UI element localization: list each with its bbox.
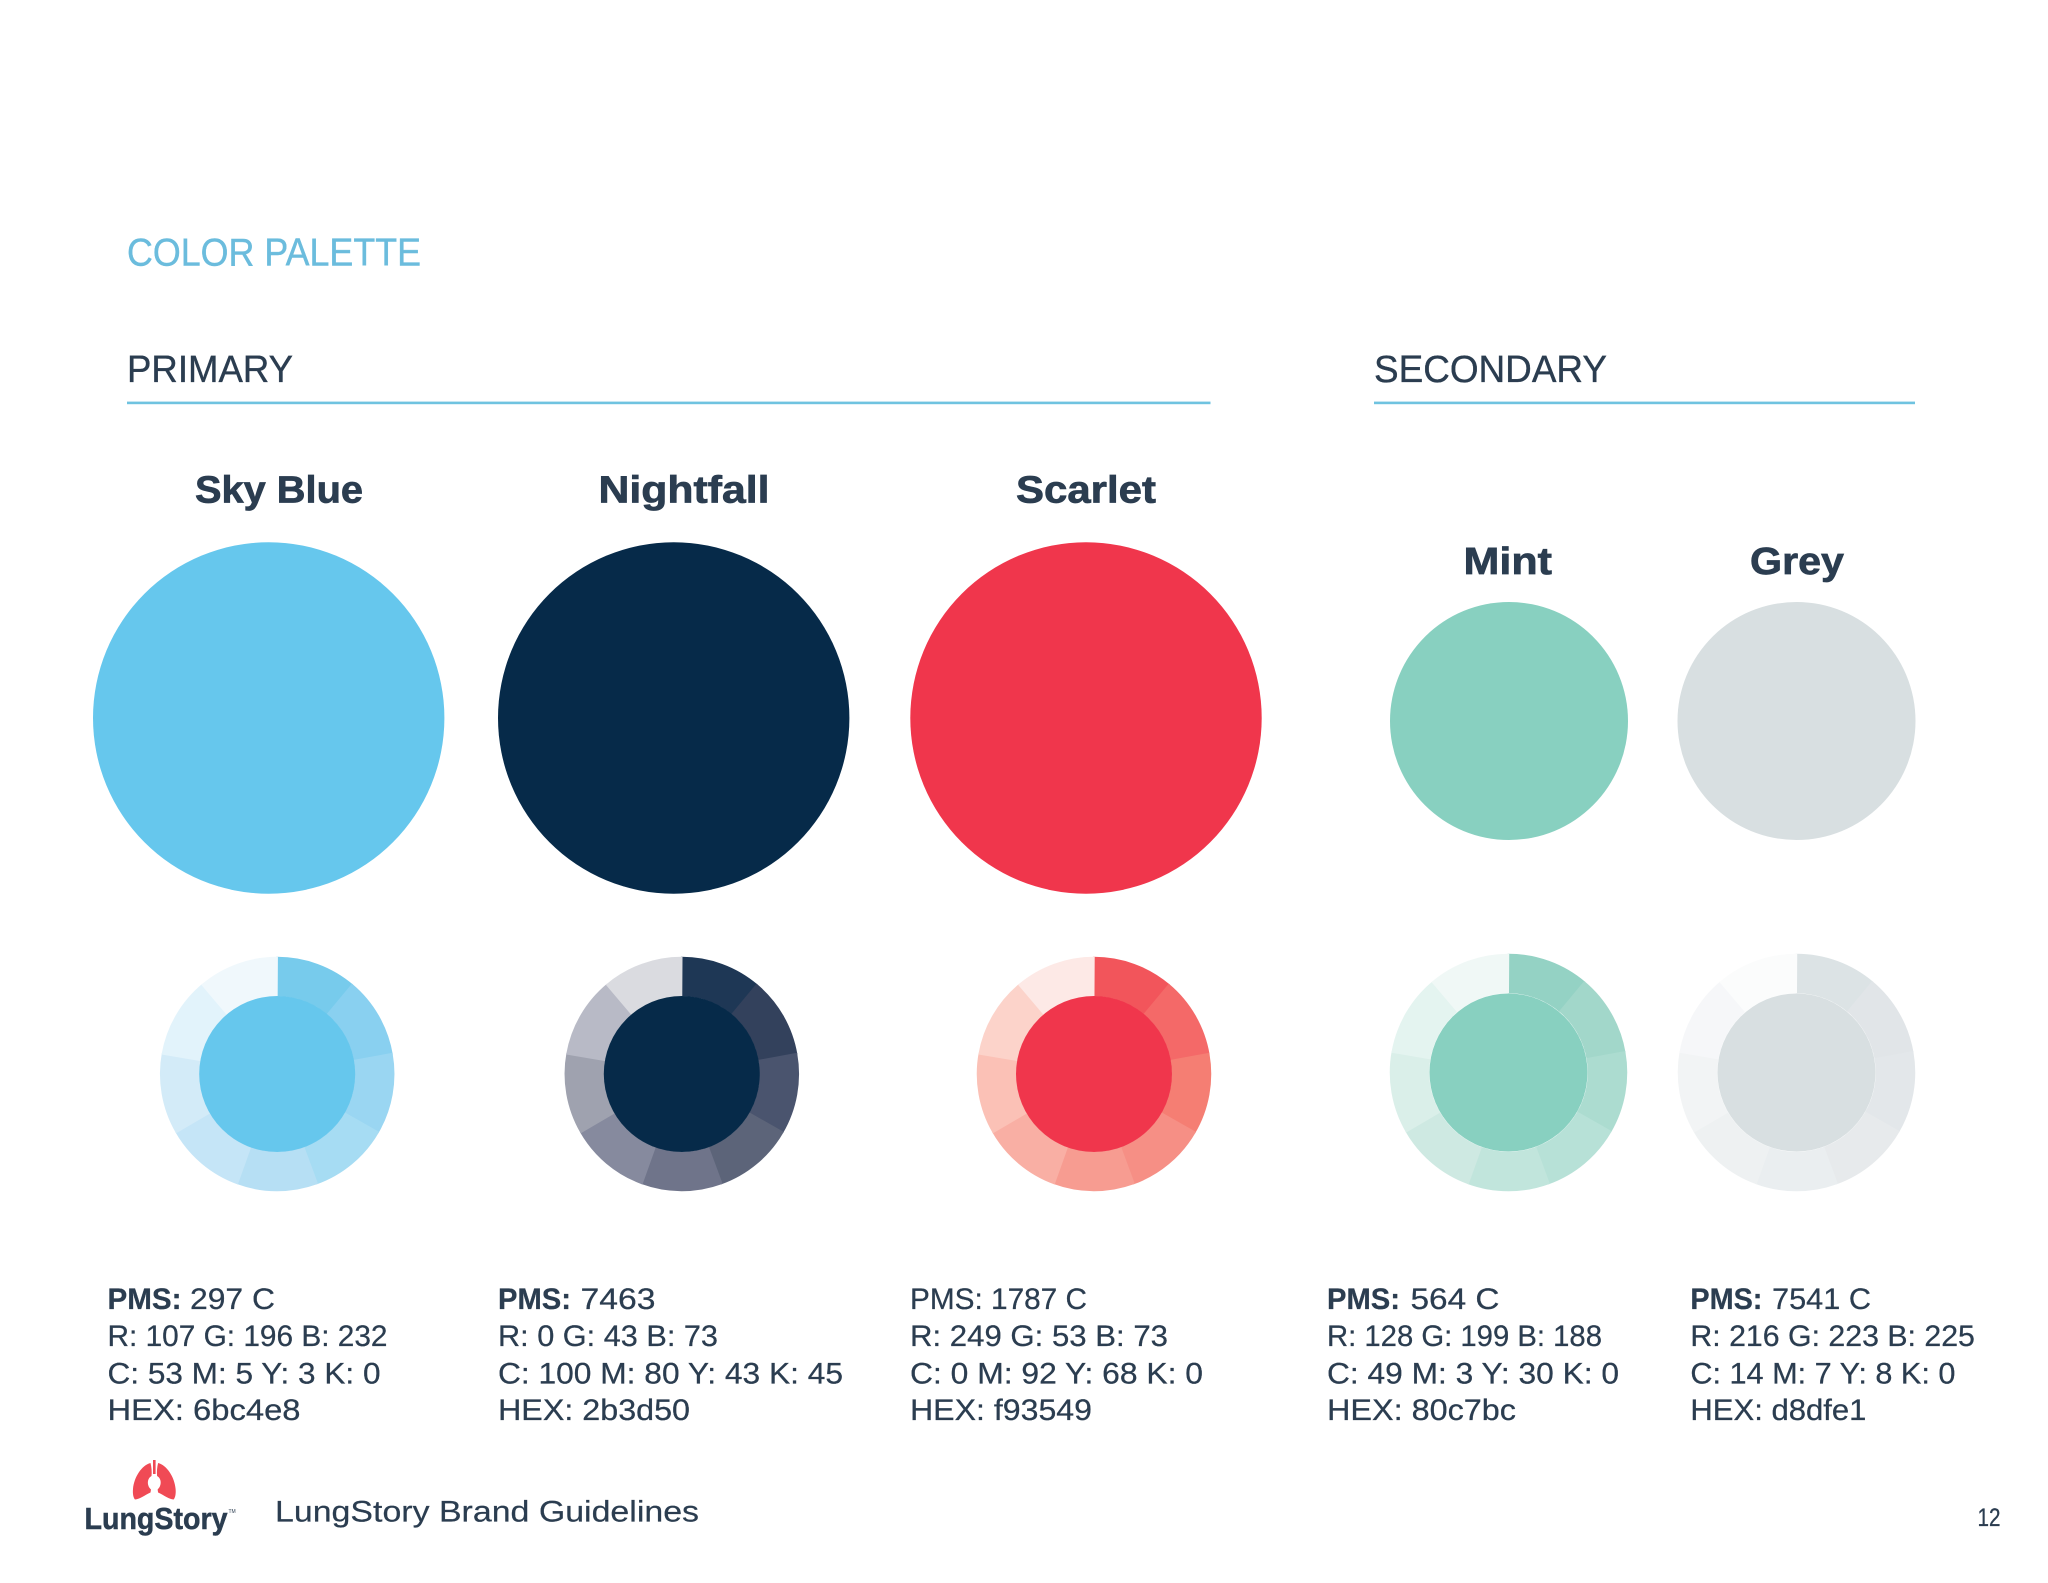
color values: scarlet: PMS: 1787 C xyxy=(910,1283,1087,1316)
logo: LungStory xyxy=(84,1460,236,1536)
color values: grey: HEX: d8dfe1 xyxy=(1690,1394,1866,1427)
color values: mint: C: 49 M: 3 Y: 30 K: 0 xyxy=(1327,1358,1619,1390)
color values: sky blue: PMS: xyxy=(108,1283,182,1316)
color values: sky blue: HEX: 6bc4e8 xyxy=(108,1394,300,1427)
swatch: nightfall xyxy=(498,542,849,894)
color values: mint: 564 C xyxy=(1410,1283,1500,1316)
swatch: grey xyxy=(1678,602,1916,840)
panel: mint xyxy=(1327,541,1648,1427)
tint wheel: grey xyxy=(1657,933,1936,1212)
name: mint: Mint xyxy=(1464,541,1552,583)
color values: nightfall: PMS: xyxy=(498,1283,571,1316)
color values: mint: R: 128 G: 199 B: 188 xyxy=(1327,1320,1602,1353)
color values: nightfall xyxy=(498,1283,843,1427)
panel: grey xyxy=(1657,541,1975,1427)
color values: scarlet: R: 249 G: 53 B: 73 xyxy=(910,1320,1168,1353)
icon: lungs xyxy=(133,1460,176,1500)
trademark: TM xyxy=(228,1509,236,1515)
color values: mint xyxy=(1327,1283,1619,1427)
tint wheel: nightfall xyxy=(544,937,819,1211)
color values: grey: PMS: xyxy=(1690,1283,1762,1316)
color values: grey xyxy=(1690,1283,1975,1427)
color values: sky blue: C: 53 M: 5 Y: 3 K: 0 xyxy=(108,1358,380,1390)
swatch: sky blue xyxy=(93,542,444,894)
color values: scarlet: HEX: f93549 xyxy=(910,1394,1092,1427)
color values: sky blue xyxy=(108,1283,388,1427)
heading: secondary: SECONDARY xyxy=(1374,349,1607,391)
panel: scarlet xyxy=(910,470,1262,1427)
color values: nightfall: C: 100 M: 80 Y: 43 K: 45 xyxy=(498,1358,843,1390)
panel: nightfall xyxy=(498,470,849,1427)
heading: primary: PRIMARY xyxy=(127,349,293,391)
name: scarlet: Scarlet xyxy=(1016,470,1156,512)
color values: grey: R: 216 G: 223 B: 225 xyxy=(1690,1320,1975,1353)
tint wheel: scarlet xyxy=(957,937,1231,1211)
name: sky blue: Sky Blue xyxy=(195,470,363,512)
color values: sky blue: R: 107 G: 196 B: 232 xyxy=(108,1320,388,1353)
swatch: mint xyxy=(1390,602,1628,840)
color values: nightfall: HEX: 2b3d50 xyxy=(498,1394,690,1427)
page number: 12 xyxy=(1978,1504,2000,1532)
color values: grey: 7541 C xyxy=(1772,1283,1871,1316)
panel: sky blue xyxy=(93,470,444,1427)
tint wheel: sky blue xyxy=(140,937,415,1211)
name: nightfall: Nightfall xyxy=(598,470,770,512)
color values: mint: PMS: xyxy=(1327,1283,1400,1316)
color values: sky blue: 297 C xyxy=(190,1283,275,1316)
swatch: scarlet xyxy=(910,542,1262,894)
color values: scarlet: C: 0 M: 92 Y: 68 K: 0 xyxy=(910,1358,1203,1390)
color values: mint: HEX: 80c7bc xyxy=(1327,1394,1516,1427)
color values: grey: C: 14 M: 7 Y: 8 K: 0 xyxy=(1690,1358,1955,1390)
name: grey: Grey xyxy=(1750,541,1844,583)
title: COLOR PALETTE xyxy=(127,232,421,275)
color values: nightfall: R: 0 G: 43 B: 73 xyxy=(498,1320,718,1353)
wordmark: LungStory xyxy=(84,1501,228,1536)
footer title: LungStory Brand Guidelines xyxy=(275,1496,699,1528)
color values: scarlet xyxy=(910,1283,1203,1427)
color values: nightfall: 7463 xyxy=(580,1283,656,1316)
tint wheel: mint xyxy=(1369,933,1648,1212)
